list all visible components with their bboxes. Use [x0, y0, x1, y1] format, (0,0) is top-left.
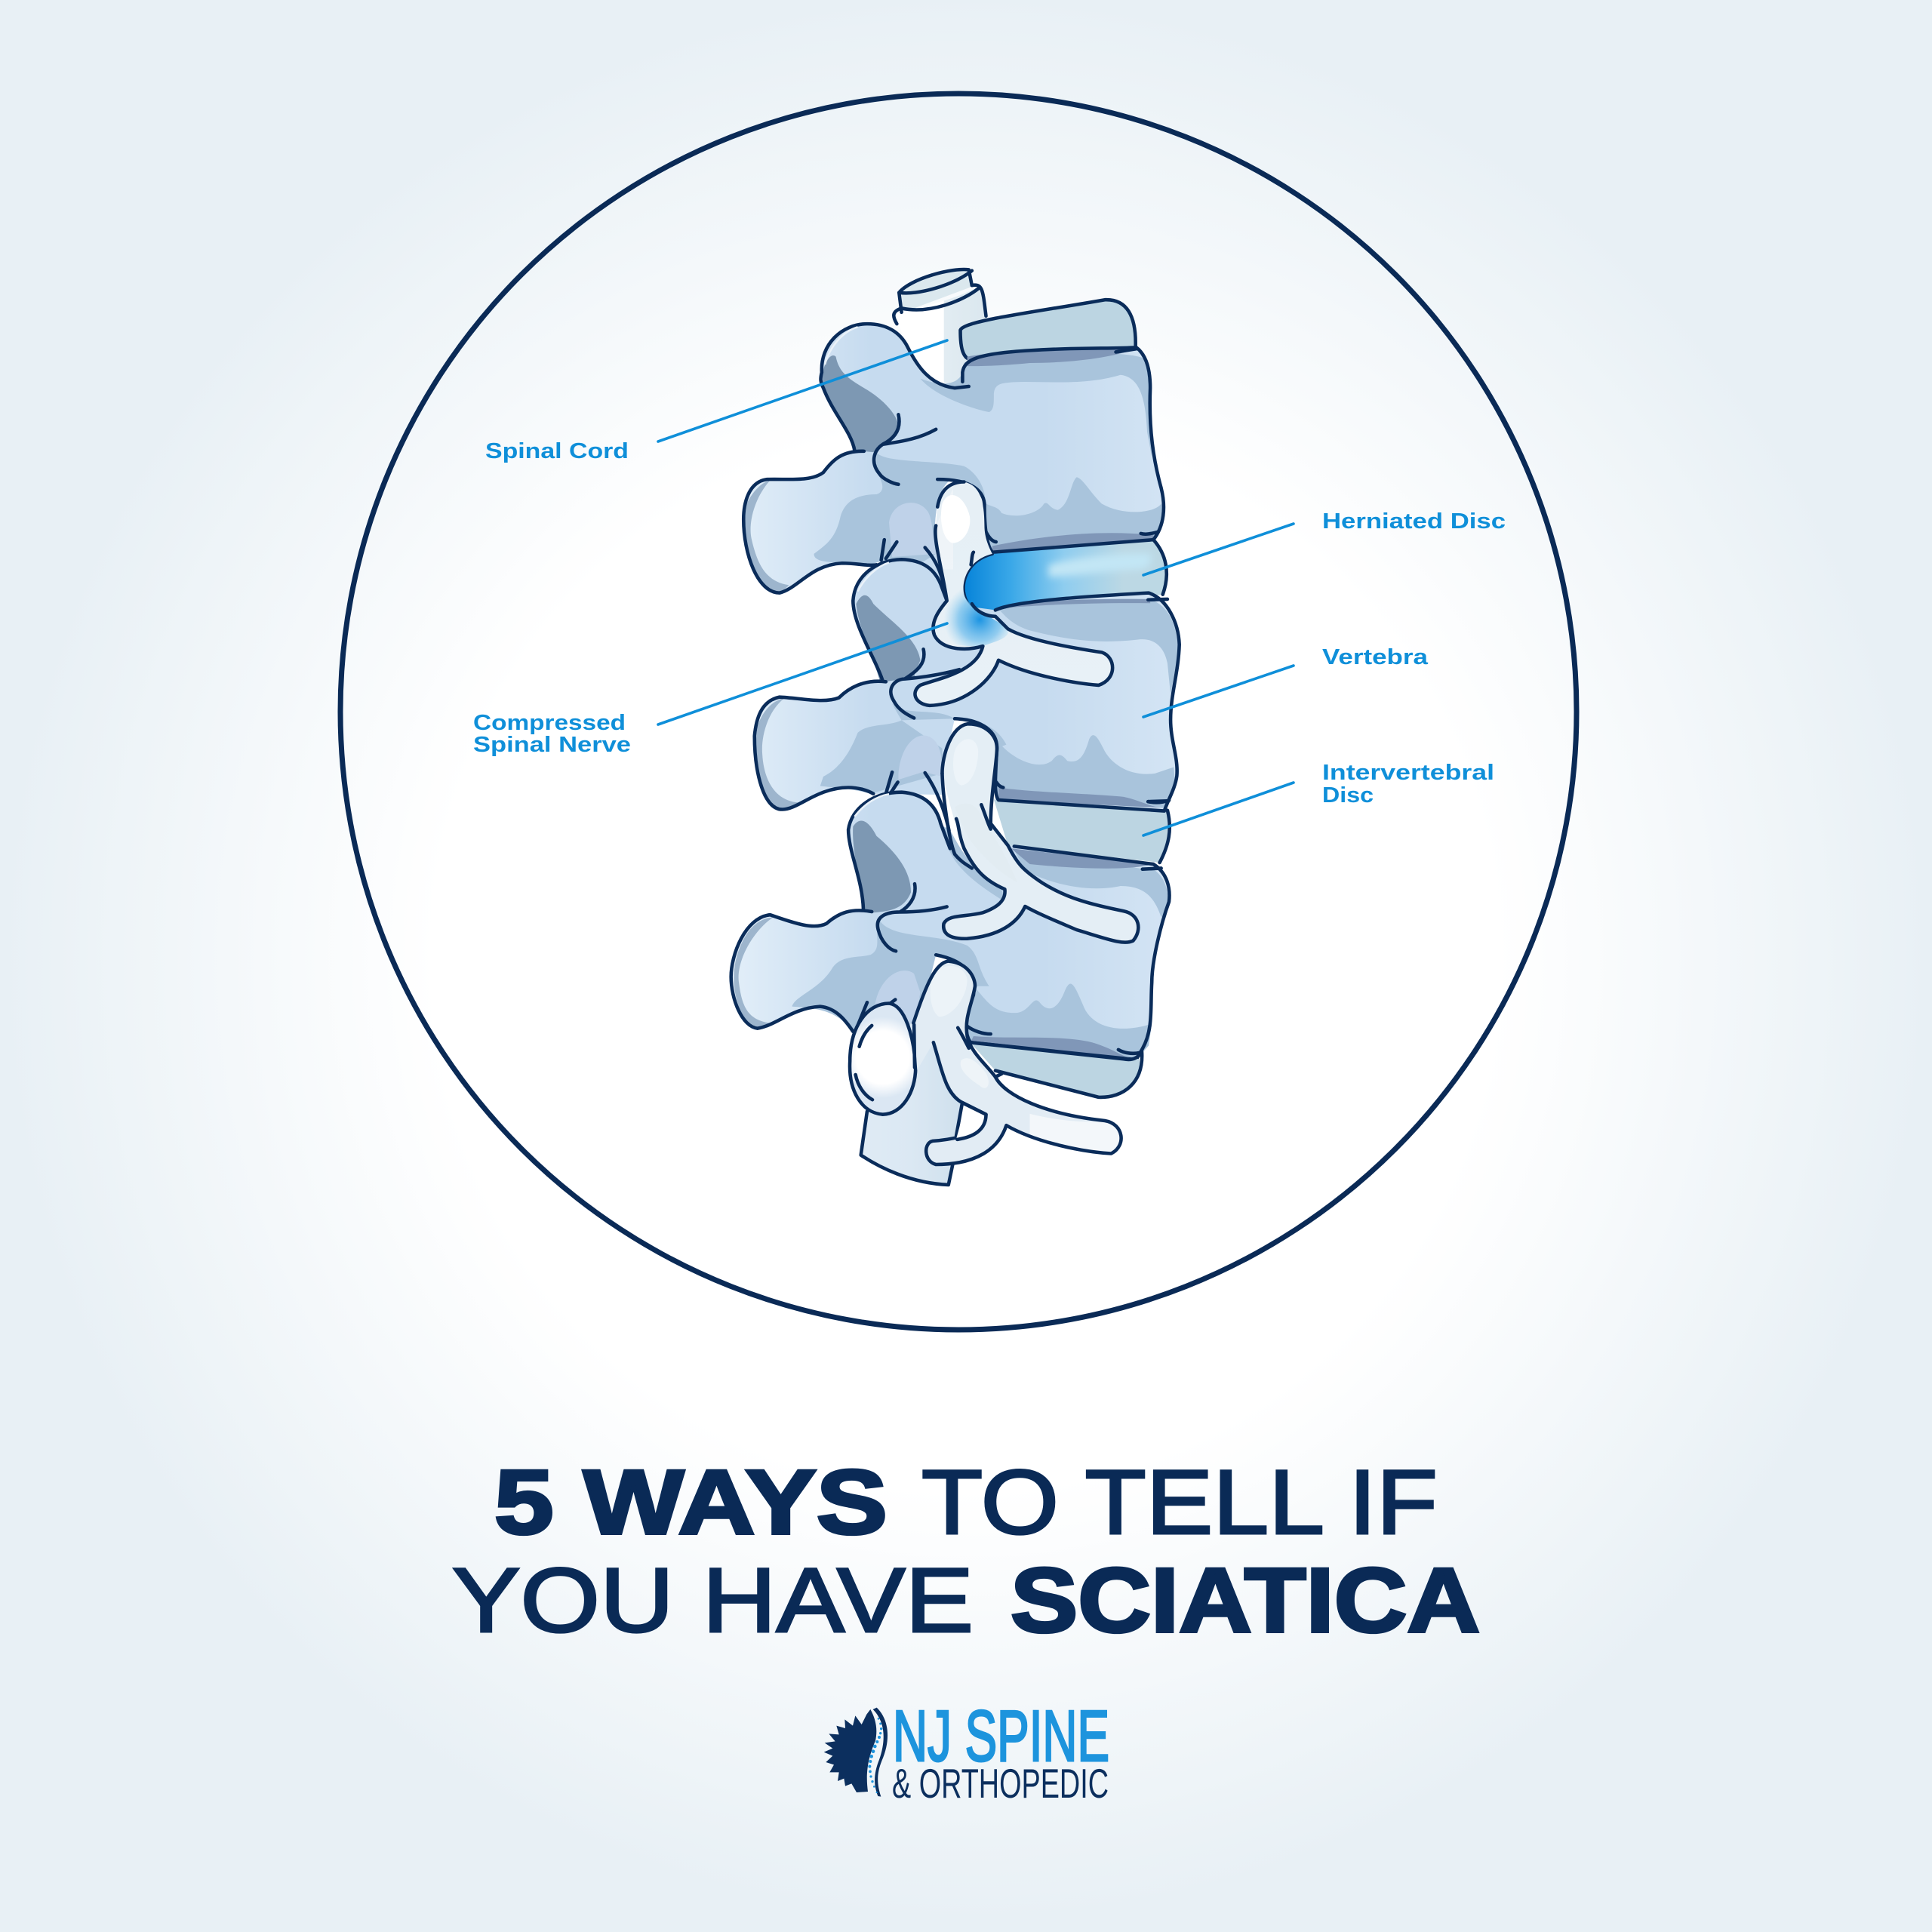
icon: spine sunburst: [824, 1708, 888, 1797]
logo wordmark: NJ SPINE: [893, 1696, 1109, 1777]
leader: compressed spinal nerve: [658, 623, 947, 724]
logo: [824, 1696, 1109, 1807]
lumbar vertebra 2: [755, 559, 1180, 835]
label: intervertebral disc: Disc: [1322, 783, 1374, 808]
label: herniated disc: Herniated Disc: [1322, 509, 1506, 534]
title: TO TELL IF: [921, 1451, 1438, 1553]
vertebra 1 shading: [920, 353, 1152, 457]
label: intervertebral disc: [1322, 761, 1494, 808]
middle intervertebral disc: [994, 799, 1170, 863]
logo: & ORTHOPEDIC: [892, 1760, 1109, 1807]
vertebra 2 shading: [998, 598, 1178, 694]
title: [452, 1451, 1480, 1651]
label: spinal cord: Spinal Cord: [485, 439, 629, 463]
leader: vertebra: [1143, 666, 1294, 717]
label: vertebra: Vertebra: [1322, 645, 1429, 669]
spinal cord top: [894, 269, 986, 388]
title: SCIATICA: [1011, 1549, 1480, 1651]
vertebra 3 shading: [1014, 850, 1168, 918]
spine illustration: [731, 269, 1180, 1185]
top disc: [961, 300, 1136, 358]
nerve root 1 compressed: [915, 481, 1112, 706]
label: compressed spinal nerve: Compressed: [473, 711, 626, 735]
circle frame: [340, 94, 1577, 1330]
leader lines: [658, 340, 1294, 835]
lower spinal cord: [861, 1023, 964, 1185]
leader: spinal cord: [658, 340, 947, 441]
leader: intervertebral disc: [1143, 783, 1294, 835]
oval lower lobe: [850, 1004, 915, 1115]
lumbar vertebra 3: [731, 792, 1170, 1060]
title: 5 WAYS: [494, 1451, 888, 1553]
lumbar vertebra 1: [743, 324, 1164, 601]
nerve root 2: [942, 724, 1138, 943]
label: intervertebral disc: Intervertebral: [1322, 761, 1494, 785]
leader: herniated disc: [1143, 524, 1294, 575]
label: compressed spinal nerve: Spinal Nerve: [473, 733, 631, 757]
label: compressed spinal nerve: [473, 711, 631, 757]
lower disc: [971, 1042, 1142, 1097]
nerve root 3: [913, 961, 1121, 1164]
herniated disc: [964, 540, 1167, 614]
title: YOU HAVE: [452, 1549, 974, 1651]
